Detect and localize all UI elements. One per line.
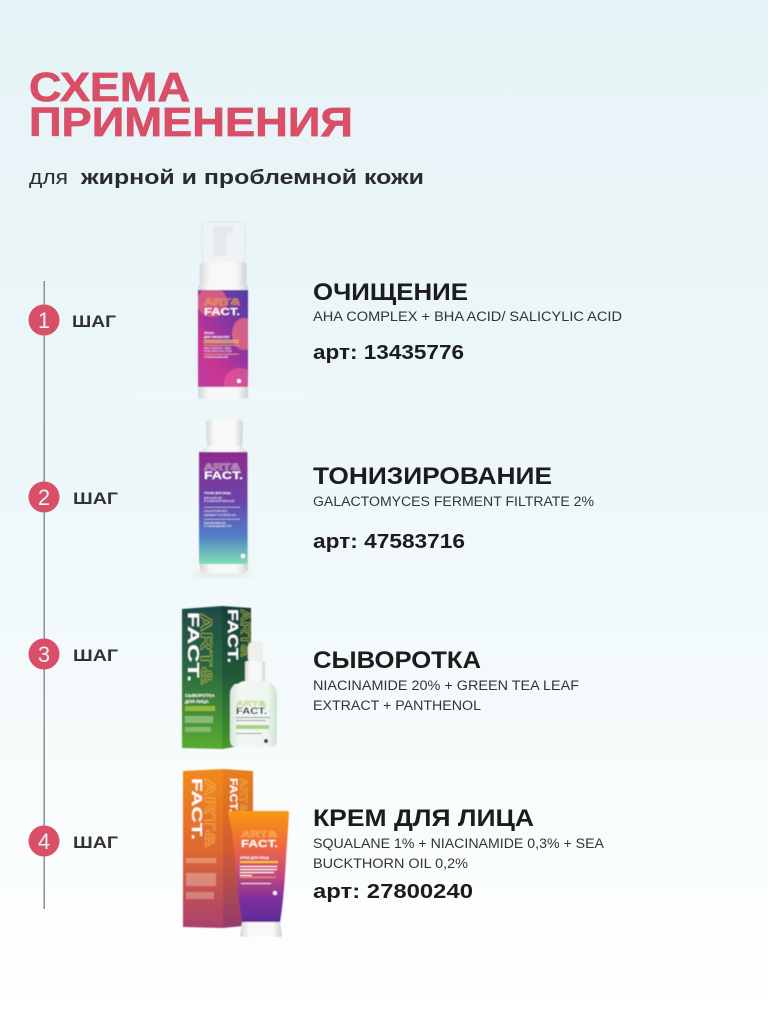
product: cream: ART& <box>237 778 249 812</box>
product: serum <box>182 606 277 749</box>
title: СХЕМА <box>29 64 190 110</box>
step 1 marker <box>28 304 116 336</box>
product: serum: ART& <box>236 701 266 708</box>
subtitle: для <box>29 167 68 189</box>
step 3 marker <box>28 638 118 670</box>
step 4 marker <box>28 826 118 856</box>
product: serum: FACT. <box>184 612 201 682</box>
product: serum: FACT. <box>236 706 267 716</box>
step 1 marker: ШАГ <box>72 312 116 331</box>
product: cream <box>183 769 289 937</box>
product: toner: И УМЕНЬШЕНИЕ ПОР <box>204 524 232 528</box>
product: toner: GALACTOMYCES <box>204 509 227 513</box>
step 3 text: СЫВОРОТКА <box>313 647 481 674</box>
product: toner: FACT. <box>204 470 243 482</box>
product: foam cleanser: FACT. <box>204 306 240 318</box>
product: foam cleanser: ACID/ SALICYLIC ACID <box>204 349 232 353</box>
step 3 text <box>313 647 579 713</box>
step 4 text: SQUALANE 1% + NIACINAMIDE 0,3% + SEA <box>313 836 604 851</box>
title: ПРИМЕНЕНИЯ <box>29 99 353 145</box>
step 1 text: арт: 13435776 <box>313 342 464 364</box>
step 3 marker: ШАГ <box>73 646 118 665</box>
product: cream: ART& <box>201 778 218 848</box>
step 2 marker: 2 <box>38 485 50 510</box>
product: toner: ДЛЯ ЖИРНОЙ <box>204 496 222 500</box>
step 2 marker <box>28 482 118 512</box>
product: foam cleanser: AHA COMPLEX + BHA <box>204 346 231 350</box>
product: cream: FACT. <box>227 778 239 812</box>
step 1 text: AHA COMPLEX + BHA ACID/ SALICYLIC ACID <box>313 309 622 324</box>
step 1 text: ОЧИЩЕНИЕ <box>313 279 468 306</box>
product: foam cleanser: ДЛЯ УМЫВАНИЯ <box>204 335 229 339</box>
step 4 marker: 4 <box>38 829 50 854</box>
product: foam cleanser: ПЕНКА <box>204 331 215 335</box>
product: foam cleanser: ОТШЕЛУШИВАНИЕ <box>204 355 228 359</box>
step 4 text: BUCKTHORN OIL 0,2% <box>313 856 468 871</box>
product: serum: FACT. <box>224 609 241 663</box>
product: serum: ДЛЯ ЛИЦА <box>185 699 210 704</box>
subtitle <box>29 167 424 189</box>
product: foam cleanser <box>197 222 249 399</box>
product: toner: ТОНИК ДЛЯ ЛИЦА <box>204 491 232 495</box>
step 1 text <box>313 279 622 364</box>
product: toner: И КОМБИНИРОВАННОЙ <box>204 499 234 503</box>
product: serum: СЫВОРОТКА <box>185 693 215 698</box>
step 2 text: ТОНИЗИРОВАНИЕ <box>313 463 552 490</box>
product: cream: ART& <box>241 830 277 839</box>
timeline line <box>44 281 45 909</box>
product: toner: ВЫРАВНИВАНИЕ <box>204 521 226 525</box>
step 4 text: арт: 27800240 <box>313 881 473 903</box>
title <box>29 64 353 145</box>
product: serum: ART& <box>238 609 253 657</box>
product: foam cleanser: ART& <box>204 297 241 307</box>
product: cream: FACT. <box>241 838 278 850</box>
product: toner <box>192 419 252 576</box>
step 2 text <box>313 463 594 553</box>
step 3 text: NIACINAMIDE 20% + GREEN TEA LEAF <box>313 678 579 693</box>
step 2 text: арт: 47583716 <box>313 531 465 553</box>
step 2 text: GALACTOMYCES FERMENT FILTRATE 2% <box>313 494 594 509</box>
step 2 marker: ШАГ <box>73 489 118 508</box>
step 4 text: КРЕМ ДЛЯ ЛИЦА <box>313 805 534 832</box>
product: toner: ART& <box>204 462 241 472</box>
subtitle: жирной и проблемной кожи <box>80 167 424 189</box>
step 3 marker: 3 <box>38 642 50 667</box>
step 3 text: EXTRACT + PANTHENOL <box>313 698 482 713</box>
product: toner: FERMENT FILTRATE 2% <box>204 513 236 517</box>
step 4 text <box>313 805 604 903</box>
product: cream: КРЕМ ДЛЯ ЛИЦА <box>240 856 270 860</box>
product: cream: FACT. <box>188 778 205 840</box>
step 1 marker: 1 <box>38 308 50 333</box>
product: serum: ART& <box>197 613 214 686</box>
step 4 marker: ШАГ <box>73 833 118 852</box>
